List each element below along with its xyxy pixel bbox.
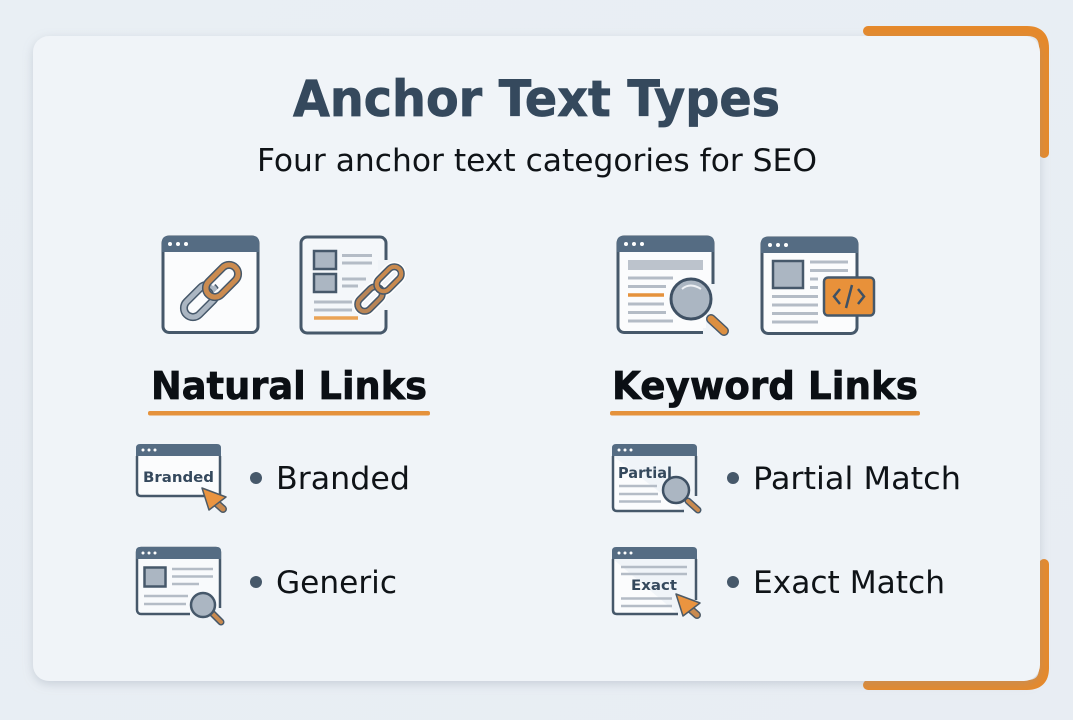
subtitle: Four anchor text categories for SEO [257,143,817,179]
bullet: Branded [250,472,262,484]
bullet: Exact Match [727,576,739,588]
icon: browser window with Partial text and magnifier [612,444,698,511]
icon: browser window with Partial text and magnifier: Partial [618,464,672,482]
heading: Keyword Links: Keyword Links [612,364,918,408]
icon: browser window with chain link [162,236,259,332]
icon: browser window with content and magnifier [136,547,224,622]
label: Partial Match: Partial Match [753,461,961,497]
label: Branded: Branded [276,461,410,497]
orange corner accent: bottom right [868,564,1044,685]
icon: browser window with Exact text and cursor [612,547,700,616]
icon: browser window with Branded text and cursor [136,444,226,510]
icon: browser window with search result and magnifier [617,236,724,336]
heading underline: Keyword Links [610,411,920,416]
label: Exact Match: Exact Match [753,565,945,601]
bullet: Partial Match [727,472,739,484]
icon: document with chain link [301,237,404,333]
title: Anchor Text Types [293,70,780,128]
icon: browser window with Exact text and cursor: Exact [631,578,677,594]
bullet: Generic [250,576,262,588]
icon: browser window with code badge [761,237,874,334]
orange corner accent: top right [868,31,1044,153]
heading underline: Natural Links [148,411,430,416]
heading: Natural Links: Natural Links [151,364,427,408]
label: Generic: Generic [276,565,397,601]
icon: browser window with Branded text and cursor: Branded [143,470,214,486]
